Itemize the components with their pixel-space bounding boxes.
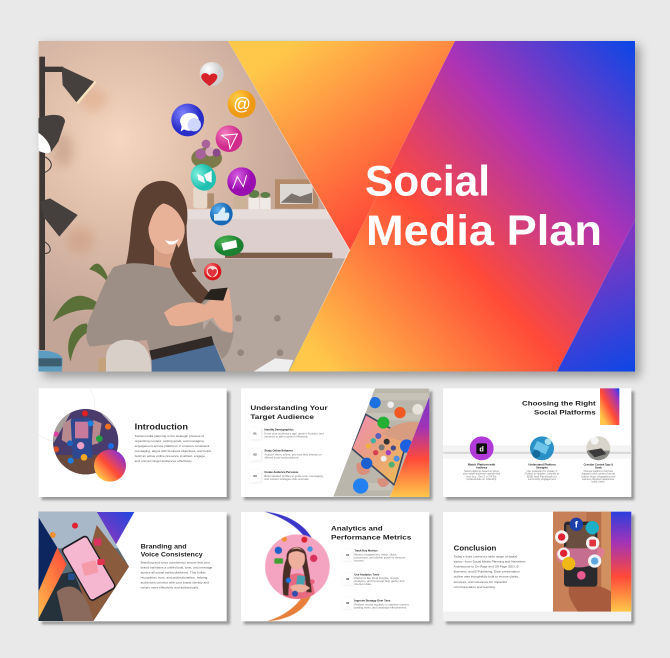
- body text: Architecture to On-Page and Off-Page SEO, E-: [454, 565, 520, 569]
- gradient strip: [611, 512, 631, 612]
- column: content type: business objectives (awareness,: [582, 478, 615, 481]
- column: audience: Match Platform with: [468, 464, 496, 467]
- body text: engagement across platforms. It ensures consistent: [135, 444, 209, 448]
- slide: Analytics and Performance Metrics: [241, 512, 432, 624]
- metric 03: Analyze results regularly to optimize content,: [354, 603, 410, 606]
- heading: Analytics and: [331, 526, 383, 533]
- heading: Understanding Your: [250, 405, 328, 412]
- column: content type: Goals: [595, 466, 602, 469]
- gradient strip: [390, 397, 429, 497]
- metric 03: Improve Strategy Over Time: [354, 599, 391, 602]
- body text: organizing content, setting goals, and managing: [135, 439, 204, 443]
- step 01: Know your audience's age, gender, location, and: [264, 433, 324, 436]
- icon: chat ball: [171, 104, 204, 136]
- body text: values more effectively and authentically.: [141, 586, 199, 590]
- step 02: 02: [253, 453, 257, 457]
- slide: Conclusion: [443, 512, 634, 624]
- metric 01: success.: [354, 560, 365, 563]
- column: content type: Choose platforms that best: [584, 470, 613, 473]
- heading: [522, 401, 597, 416]
- heading: [331, 526, 412, 541]
- icon: small heart ball: [204, 263, 221, 280]
- body text: topics—from Social Media Planning and Narratives: [454, 560, 526, 564]
- step 02: different social media platforms.: [264, 457, 300, 460]
- icon: thumbs-up ball: [210, 203, 233, 225]
- column: strengths: Strengths: [536, 466, 548, 469]
- slide: Understanding Your Target Audience: [241, 388, 432, 500]
- metric 01: conversions, and follower growth to measure: [354, 557, 406, 560]
- metric 02: Platforms like Meta Insights, Google: [354, 577, 400, 580]
- title: Social: [365, 158, 490, 206]
- gradient triangle top: [97, 512, 134, 544]
- body text: Business, and E-Publishing. Each presentation: [454, 570, 520, 574]
- icon: at sign ball: @: [233, 94, 251, 114]
- body text: [141, 561, 213, 590]
- title: Media Plan: [366, 207, 602, 255]
- gradient circle: [94, 450, 126, 482]
- circular photo: phone with app icons: [52, 408, 120, 477]
- metric 01: 01: [346, 553, 350, 557]
- photo: phone in hands: [38, 512, 130, 622]
- column: strengths: [524, 436, 560, 481]
- heading: Performance Metrics: [331, 534, 412, 541]
- body text: communication and learning.: [454, 585, 496, 589]
- column: audience: [463, 436, 501, 481]
- step 01: 01: [253, 431, 257, 435]
- body text: structure, and relevance for impactful: [454, 580, 507, 584]
- heading: Social Platforms: [534, 409, 596, 416]
- body text: across all social media platforms. This builds: [141, 571, 206, 575]
- circular photo: woman with phone: [265, 534, 330, 600]
- gradient shape: upper orange wedge: [228, 41, 455, 250]
- heading: Branding and: [141, 544, 187, 551]
- photo: hand holding phone: [332, 388, 430, 497]
- metric 01: Track Key Metrics: [354, 550, 378, 553]
- body text: Branding and voice consistency ensure that your: [141, 561, 210, 565]
- navy triangle: [39, 518, 57, 591]
- column: audience: time (e.g., Gen Z on TikTok,: [466, 475, 497, 478]
- body text: [135, 434, 211, 463]
- column: content type: (videos, blogs, infographics) and: [581, 475, 616, 478]
- body text: build an active online presence to attract, engage,: [135, 454, 206, 458]
- metric 03: [342, 597, 410, 609]
- heading: [141, 544, 203, 559]
- woman: [86, 181, 234, 373]
- icon: envelope ball: [214, 235, 244, 256]
- body text: [454, 555, 526, 589]
- metric 03: posting times, and campaign effectiveness.: [354, 606, 407, 609]
- column: content type: [581, 436, 616, 484]
- step 01: interests to tailor content effectively.: [264, 436, 309, 439]
- icon: at sign ball: [228, 90, 256, 118]
- step 03: [250, 470, 324, 482]
- gradient shape: main diagonal band: [289, 41, 635, 372]
- column: audience: d: [479, 444, 484, 453]
- gradient shape: blue corner: [557, 220, 635, 372]
- column: strengths: Understand Platform: [528, 464, 556, 467]
- column: content type: Consider Content Type &: [584, 464, 613, 467]
- gradient corner block: [600, 388, 619, 425]
- heading: Conclusion: [454, 544, 497, 553]
- column: strengths: (Twitter) for updates, LinkedIn for: [524, 473, 560, 476]
- step 03: 03: [253, 474, 257, 478]
- orange arc: [267, 595, 311, 621]
- column: content type: support your content format: [582, 473, 615, 476]
- body text: recognition, trust, and professionalism, helping: [141, 576, 208, 580]
- slide: Choosing the Right Social Platforms: [443, 388, 634, 500]
- column: audience: Audience: [476, 466, 488, 469]
- column: content type: leads, sales).: [592, 481, 605, 484]
- body text: outline was thoughtfully built to ensure clarity,: [454, 575, 519, 579]
- metric 02: interpret data.: [354, 583, 372, 586]
- metric 02: Use Analytics Tools: [354, 573, 380, 576]
- step 02: [250, 449, 322, 461]
- gradient left strip: [39, 548, 67, 618]
- step 03: Create Audience Personas: [264, 471, 299, 474]
- step 02: Study Online Behavior: [264, 450, 293, 453]
- icon: send ball: [216, 125, 242, 152]
- column: audience: Select platforms based on where: [464, 470, 500, 473]
- column: strengths: community engagement.: [528, 478, 556, 481]
- hero slide: Social Media Plan: [38, 41, 640, 377]
- heading: [250, 405, 328, 421]
- heading: Choosing the Right: [522, 401, 597, 408]
- heading: Introduction: [135, 422, 188, 431]
- icon: network ball: [227, 167, 256, 196]
- body text: and convert target audiences effectively.: [135, 459, 192, 463]
- body text: brand maintains a unified look, tone, and message: [141, 566, 213, 570]
- step 03: and content strategies that resonate.: [264, 478, 310, 481]
- step 03: Build detailed profiles to guide tone, messaging,: [264, 475, 324, 478]
- icon: megaphone ball: [190, 164, 216, 191]
- metric 01: Monitor engagement, reach, clicks,: [354, 554, 397, 557]
- column: audience: your target audience spends their: [463, 473, 501, 476]
- step 01: [250, 427, 324, 440]
- icon: heart ball: [200, 62, 224, 86]
- photo: phone with floating icons: f: [575, 520, 579, 530]
- heading: Target Audience: [250, 414, 314, 421]
- step 02: Analyze when, where, and how they interact on: [264, 454, 322, 457]
- body text: audiences connect with your brand identity and: [141, 581, 209, 585]
- slide: Branding and Voice Consistency: [38, 512, 230, 624]
- step 01: Identify Demographics: [264, 429, 294, 432]
- metric 03: 03: [346, 601, 350, 605]
- body text: Today's work covered a wide range of digital: [454, 555, 517, 559]
- heading: Voice Consistency: [141, 552, 203, 559]
- column: strengths: Use Instagram for visuals, X: [527, 470, 558, 473]
- title: [365, 158, 602, 255]
- column: strengths: B2B, and Facebook for: [527, 475, 557, 478]
- photo: woman on sofa with floating social icons: [38, 41, 352, 373]
- metric 02: [342, 573, 405, 586]
- body text: messaging, aligns with business objectives, and helps: [135, 449, 211, 453]
- blue arc: [264, 512, 312, 540]
- slide: Introduction: [38, 388, 232, 502]
- metric 02: Analytics, and Hootsuite help gather and: [354, 580, 405, 583]
- body text: Social media planning is the strategic process of: [135, 434, 204, 438]
- metric 01: [342, 549, 406, 563]
- metric 02: 02: [346, 577, 350, 581]
- column: audience: professionals on LinkedIn).: [466, 478, 497, 481]
- photo: phone with floating icons: [553, 512, 611, 612]
